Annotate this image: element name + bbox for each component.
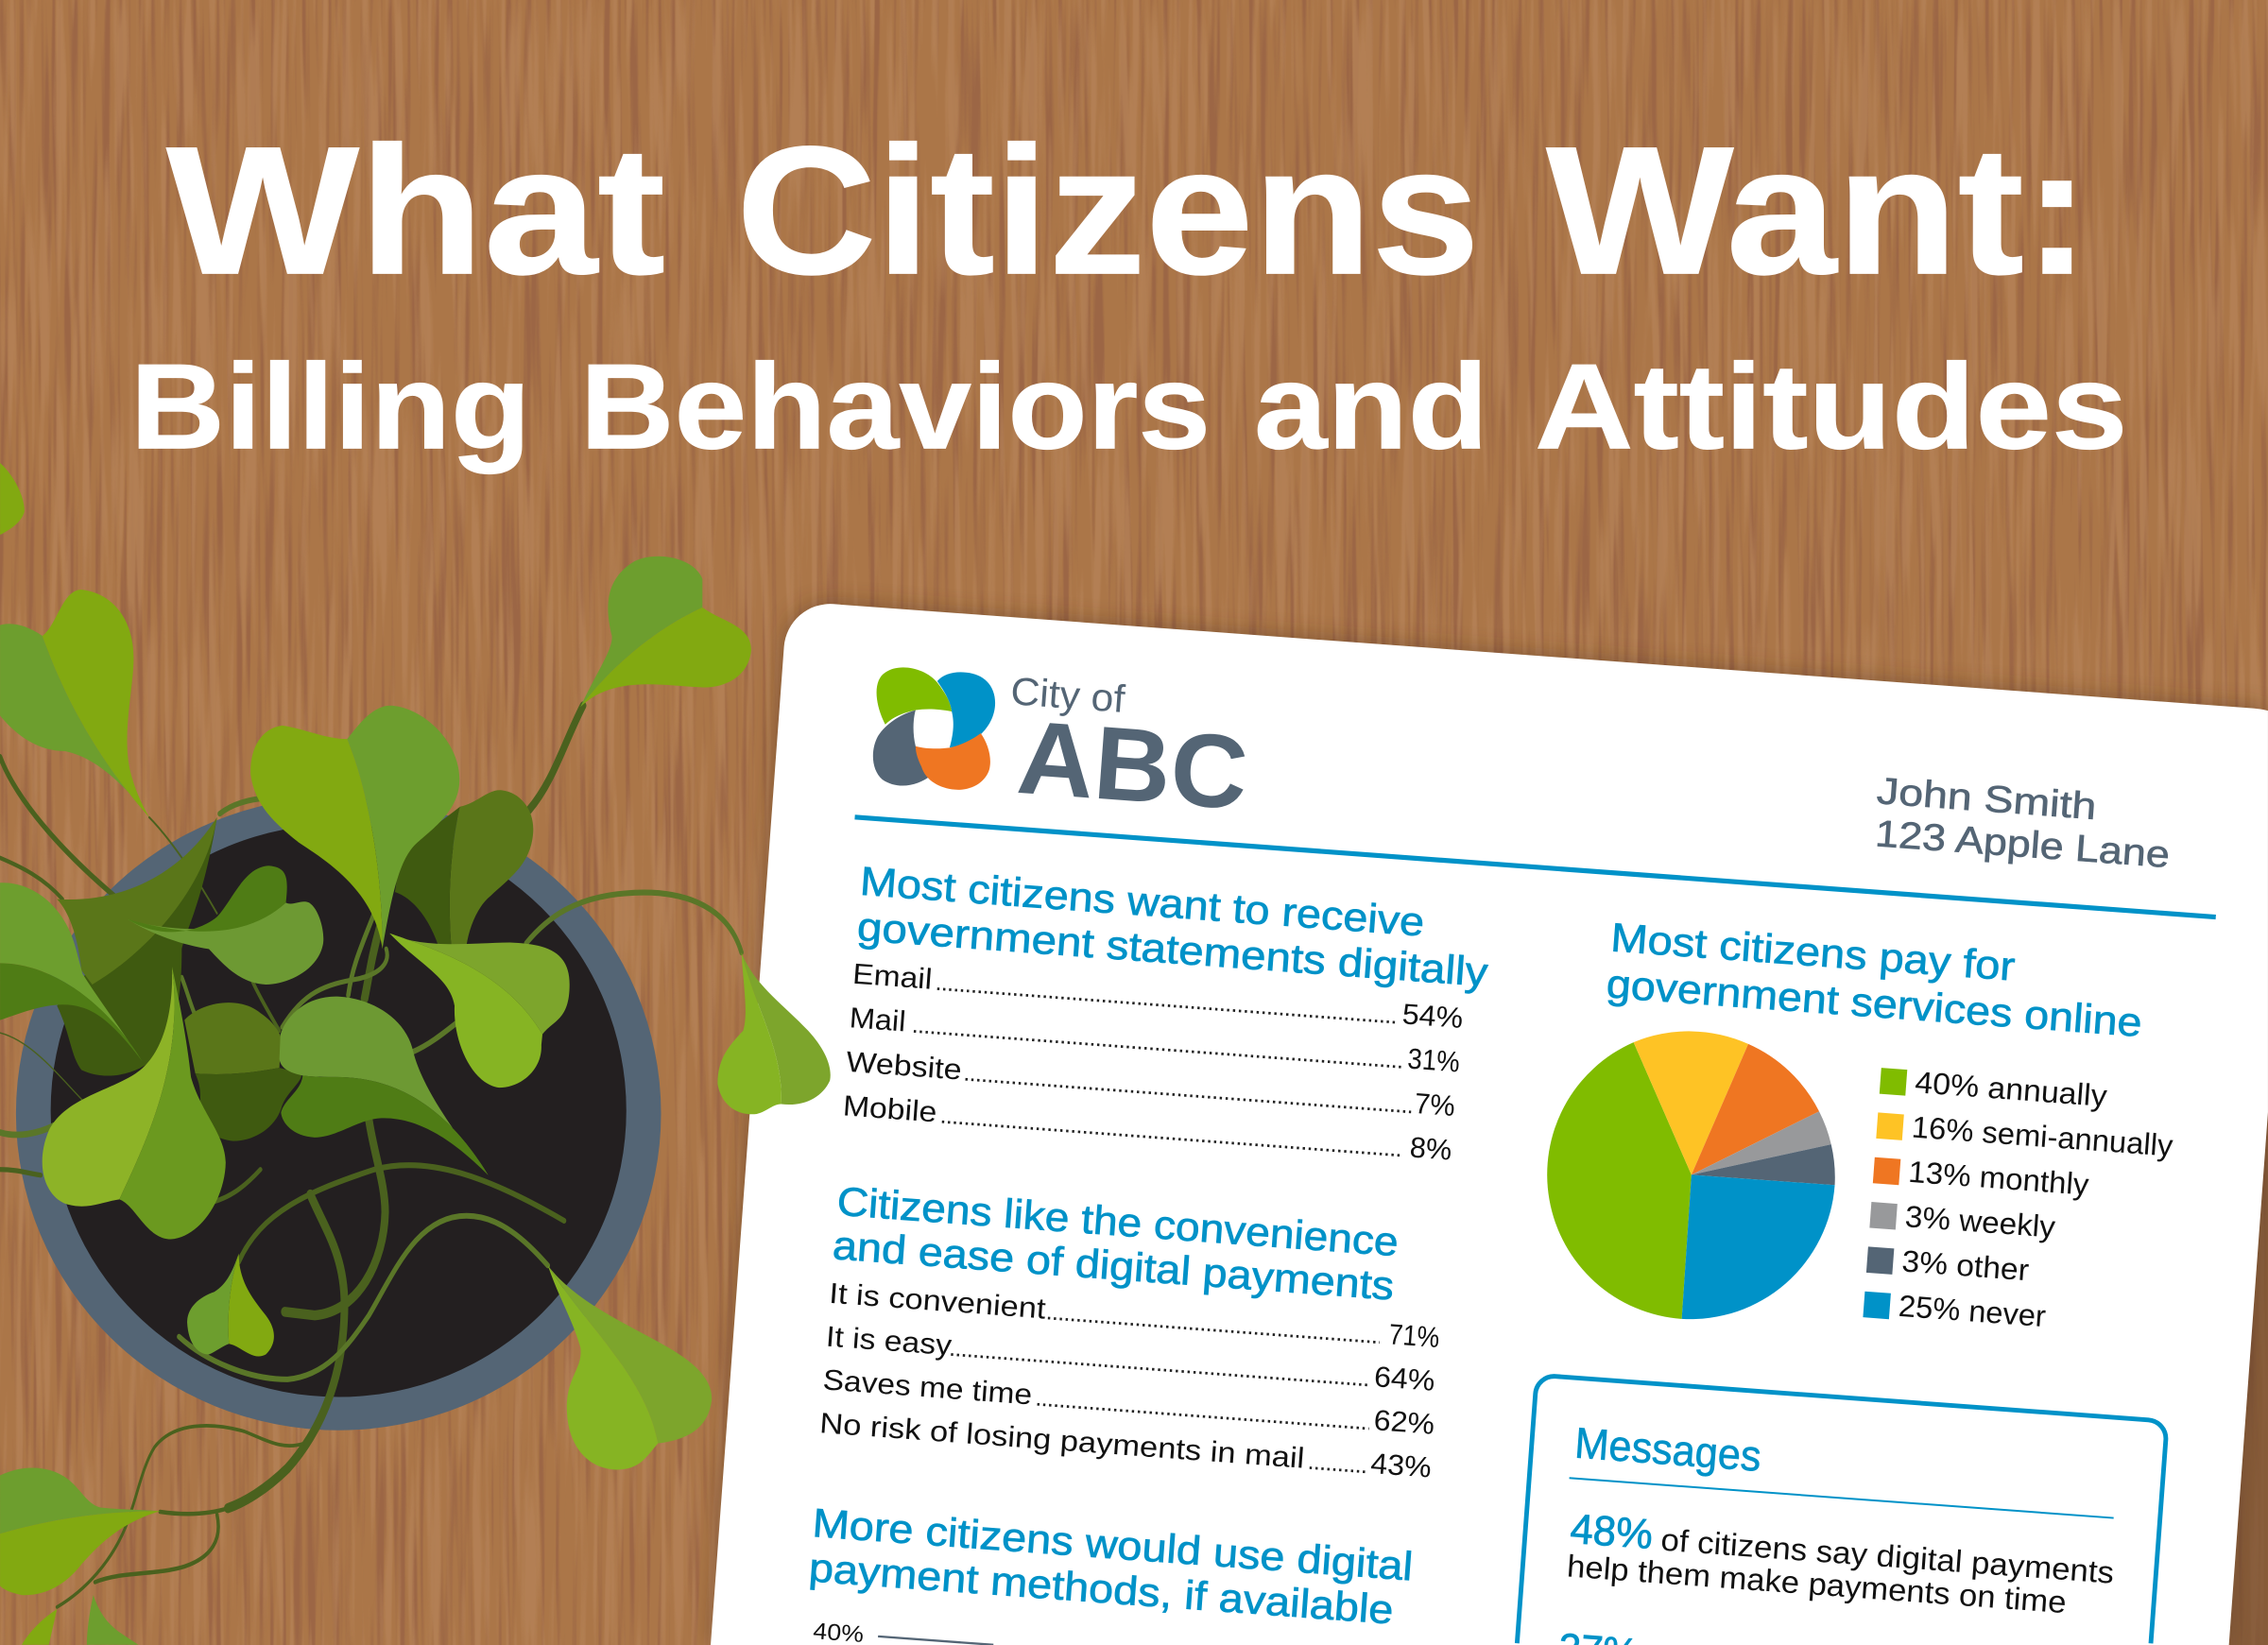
title line 2: and [1254, 339, 1488, 474]
heading: digital payment methods: More citizens would use digital [811, 1500, 1415, 1590]
legend: never: 25% never [1898, 1289, 2047, 1333]
row: convenient [828, 1277, 1440, 1354]
leaf: bottom left [0, 1468, 160, 1595]
logo mark [873, 667, 995, 790]
leaf: over sheet edge [717, 952, 831, 1114]
legend: monthly: 13% monthly [1907, 1155, 2090, 1202]
heading: convenience: Citizens like the convenience [835, 1179, 1400, 1265]
title [130, 108, 2127, 474]
leaf: dark left behind [57, 817, 217, 1075]
list: reasons [818, 1277, 1442, 1484]
title line 2 [130, 339, 2127, 474]
row: Email: Email [851, 958, 934, 996]
heading: convenience: and ease of digital payments [831, 1223, 1396, 1310]
heading: pay online: government services online [1605, 962, 2143, 1046]
leaf tips: bottom edge [22, 1595, 138, 1645]
leaf: small in pot [128, 865, 323, 985]
leaf: top-right [580, 557, 751, 707]
row: no risk [818, 1407, 1433, 1484]
row: no risk: No risk of losing payments in mail [818, 1407, 1306, 1475]
row: easy: It is easy [825, 1321, 954, 1362]
leaf: top-left [0, 590, 149, 817]
message: 48%: help them make payments on time [1566, 1548, 2068, 1619]
panel: messages [1515, 1375, 2167, 1645]
sheet rotated contents [794, 659, 2227, 1645]
row: convenient: It is convenient [828, 1277, 1047, 1326]
leaf: left edge [0, 882, 142, 1061]
row: saves time [822, 1363, 1435, 1441]
leaf: top center large [250, 706, 459, 949]
row: Website [845, 1046, 1456, 1122]
stems [0, 706, 742, 1607]
row: Website: Website [845, 1046, 963, 1087]
row: Mail: 31% [1406, 1043, 1461, 1079]
heading: digital payment methods: payment methods, if available [807, 1545, 1395, 1634]
panel: statement sheet [711, 604, 2268, 1645]
paper shadow [711, 604, 2268, 1645]
title line 2: Billing [130, 339, 531, 474]
sheet contents [0, 463, 2227, 1645]
message: 48%: 48% [1569, 1506, 1655, 1558]
title line 2: Behaviors [580, 339, 1211, 474]
leaf: small bottom in pot [187, 1254, 274, 1356]
legend: semi-annually: 16% semi-annually [1911, 1110, 2174, 1163]
legend: annually: 40% annually [1914, 1065, 2108, 1113]
row: Email: 54% [1401, 998, 1464, 1035]
heading: digital payment methods [807, 1500, 1415, 1635]
row: saves time: 62% [1373, 1404, 1435, 1441]
chart axis: 40% [812, 1619, 994, 1645]
message: 48%: of citizens say digital payments [1659, 1522, 2115, 1590]
row: easy [825, 1321, 1436, 1397]
leaf: center [280, 997, 489, 1175]
heading: receive statements: Most citizens want to receive [859, 859, 1426, 946]
leaf: dark top right behind [395, 790, 533, 947]
addressee [1872, 770, 2174, 876]
wood shade: right wedge [2229, 1112, 2268, 1645]
title line 2: Attitudes [1535, 339, 2127, 474]
messages heading: Messages [1573, 1418, 1763, 1481]
message: 48% [1566, 1506, 2116, 1623]
heading: receive statements [855, 859, 1493, 996]
leaf: big lower left [43, 967, 226, 1240]
heading: pay online [1605, 915, 2147, 1046]
logo text: ABC: ABC [1014, 699, 1251, 831]
heading: pay online: Most citizens pay for [1609, 915, 2017, 990]
plant [0, 463, 831, 1645]
heading: convenience [831, 1179, 1400, 1310]
row: no risk: 43% [1369, 1448, 1433, 1484]
leaf: center dark [184, 1002, 301, 1141]
pie legend [1863, 1063, 2177, 1342]
heading: receive statements: government statements digitally [855, 904, 1490, 996]
row: Email [851, 958, 1464, 1035]
leaf: far top-left [0, 463, 25, 535]
row: Mail: Mail [849, 1002, 907, 1038]
title line 1: What [166, 108, 665, 312]
pie chart [1547, 1031, 1835, 1319]
row: saves time: Saves me time [822, 1363, 1033, 1412]
row: Mobile [842, 1089, 1452, 1167]
row: Mail [849, 1002, 1461, 1079]
logo text: City of: City of [1009, 669, 1126, 721]
row: Mobile: 8% [1409, 1131, 1452, 1167]
legend: other: 3% other [1900, 1244, 2031, 1287]
leaf: right of center [389, 934, 570, 1088]
row: Mobile: Mobile [842, 1089, 938, 1129]
row: Website: 7% [1414, 1088, 1456, 1122]
row: convenient: 71% [1388, 1318, 1440, 1354]
row: easy: 64% [1373, 1361, 1436, 1397]
legend: weekly: 3% weekly [1904, 1199, 2056, 1244]
plant pot [16, 797, 662, 1431]
list: statement preferences [842, 958, 1464, 1167]
leaf: lower right [548, 1265, 712, 1470]
addressee: 123 Apple Lane [1874, 813, 2171, 876]
title line 1 [166, 108, 2090, 312]
title line 1: Want: [1546, 108, 2090, 312]
title line 1: Citizens [736, 108, 1480, 312]
addressee: John Smith [1876, 770, 2098, 828]
